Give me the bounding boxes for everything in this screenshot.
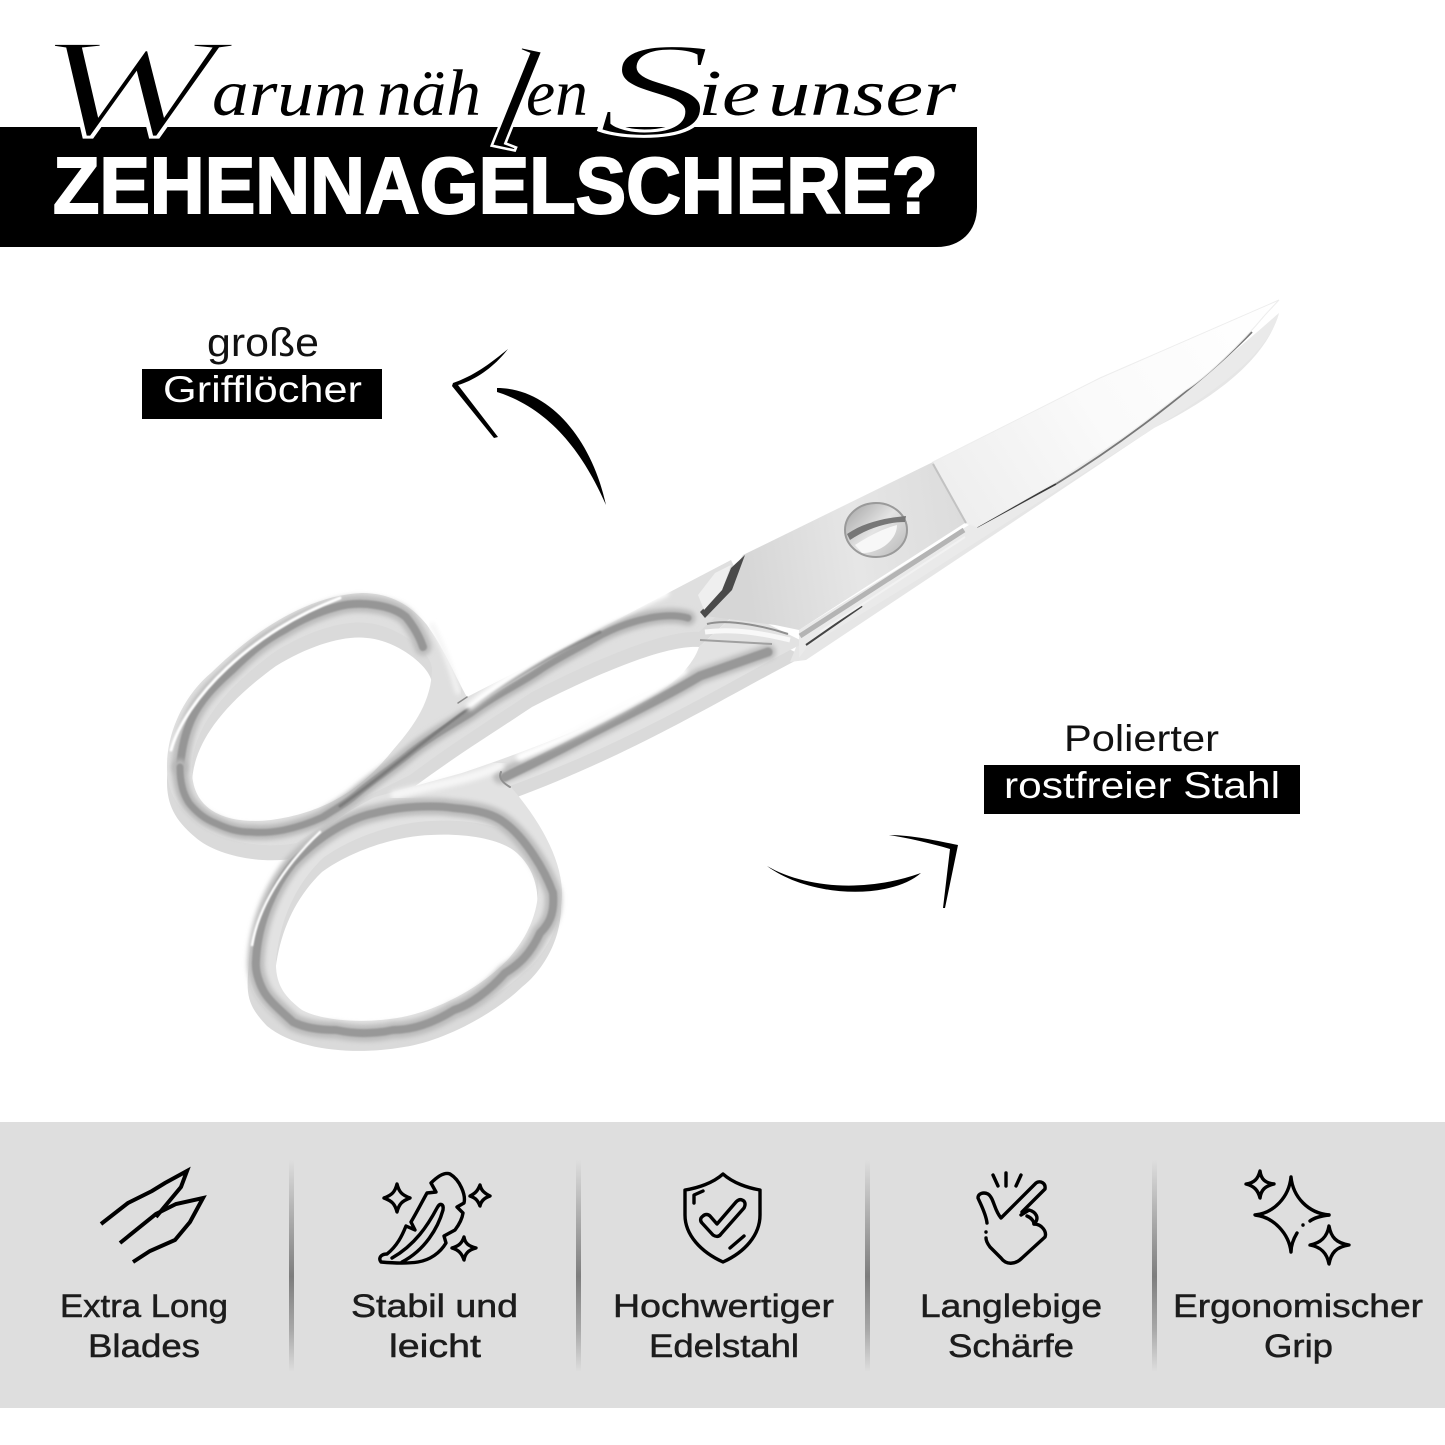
icon: snapping hand: [978, 1173, 1045, 1263]
callout: Polierter rostfreier Stahl: [984, 718, 1300, 814]
feature: Hochwertiger Edelstahl: [613, 1174, 834, 1364]
label line 1: Stabil und: [351, 1288, 518, 1324]
feature: Stabil und leicht: [351, 1173, 518, 1364]
script heading: ie: [698, 57, 760, 130]
label line 2: leicht: [389, 1328, 481, 1364]
pivot wedge: [698, 555, 745, 618]
label line 1: Langlebige: [920, 1288, 1102, 1324]
label line 1: Ergonomischer: [1173, 1288, 1423, 1324]
callout: große Grifflöcher: Grifflöcher: [163, 369, 362, 410]
script heading: näh: [377, 57, 481, 130]
upper handle: [167, 560, 745, 845]
heading second line: ZEHENNAGELSCHERE?: [53, 141, 938, 230]
arrow: to handles: [452, 349, 606, 505]
lower handle: [249, 610, 800, 1037]
script heading: S: [597, 16, 712, 165]
callout: Polierter rostfreier Stahl: rostfreier Stahl: [1004, 765, 1280, 806]
scissors shadow: [167, 313, 1279, 1051]
arrow: to steel: [767, 835, 958, 908]
label line 2: Edelstahl: [649, 1328, 799, 1364]
label line 1: Hochwertiger: [613, 1288, 834, 1324]
label line 2: Schärfe: [948, 1328, 1074, 1364]
feature: Langlebige Schärfe: [920, 1173, 1102, 1364]
label line 2: Blades: [88, 1328, 200, 1364]
cutting edge line: [977, 484, 1056, 527]
icon: tweezers: [101, 1171, 203, 1262]
icon: sparkles: [1246, 1171, 1349, 1264]
label line 2: Grip: [1264, 1328, 1333, 1364]
script heading: en: [526, 57, 588, 130]
script heading: l: [477, 16, 551, 185]
feature: Ergonomischer Grip: [1173, 1171, 1423, 1364]
scissors illustration: [167, 300, 1279, 1051]
label line 1: Extra Long: [60, 1288, 228, 1324]
pivot plate: [705, 462, 965, 630]
callout: Polierter rostfreier Stahl: Polierter: [1064, 718, 1219, 759]
title band: [0, 11, 977, 247]
lower blade: [799, 313, 1279, 658]
script heading: arum: [212, 57, 367, 130]
callout: große Grifflöcher: große: [207, 321, 319, 365]
panel: features: [0, 1122, 1445, 1408]
callout: große Grifflöcher: [142, 321, 382, 419]
feature: Extra Long Blades: [60, 1171, 228, 1364]
screw: [845, 503, 907, 557]
collar: [700, 622, 790, 644]
icon: feather with stars: [380, 1173, 490, 1263]
script heading: unser: [768, 57, 956, 130]
upper blade: [933, 300, 1279, 527]
icon: shield with check: [685, 1174, 760, 1262]
script heading: W: [38, 11, 236, 166]
